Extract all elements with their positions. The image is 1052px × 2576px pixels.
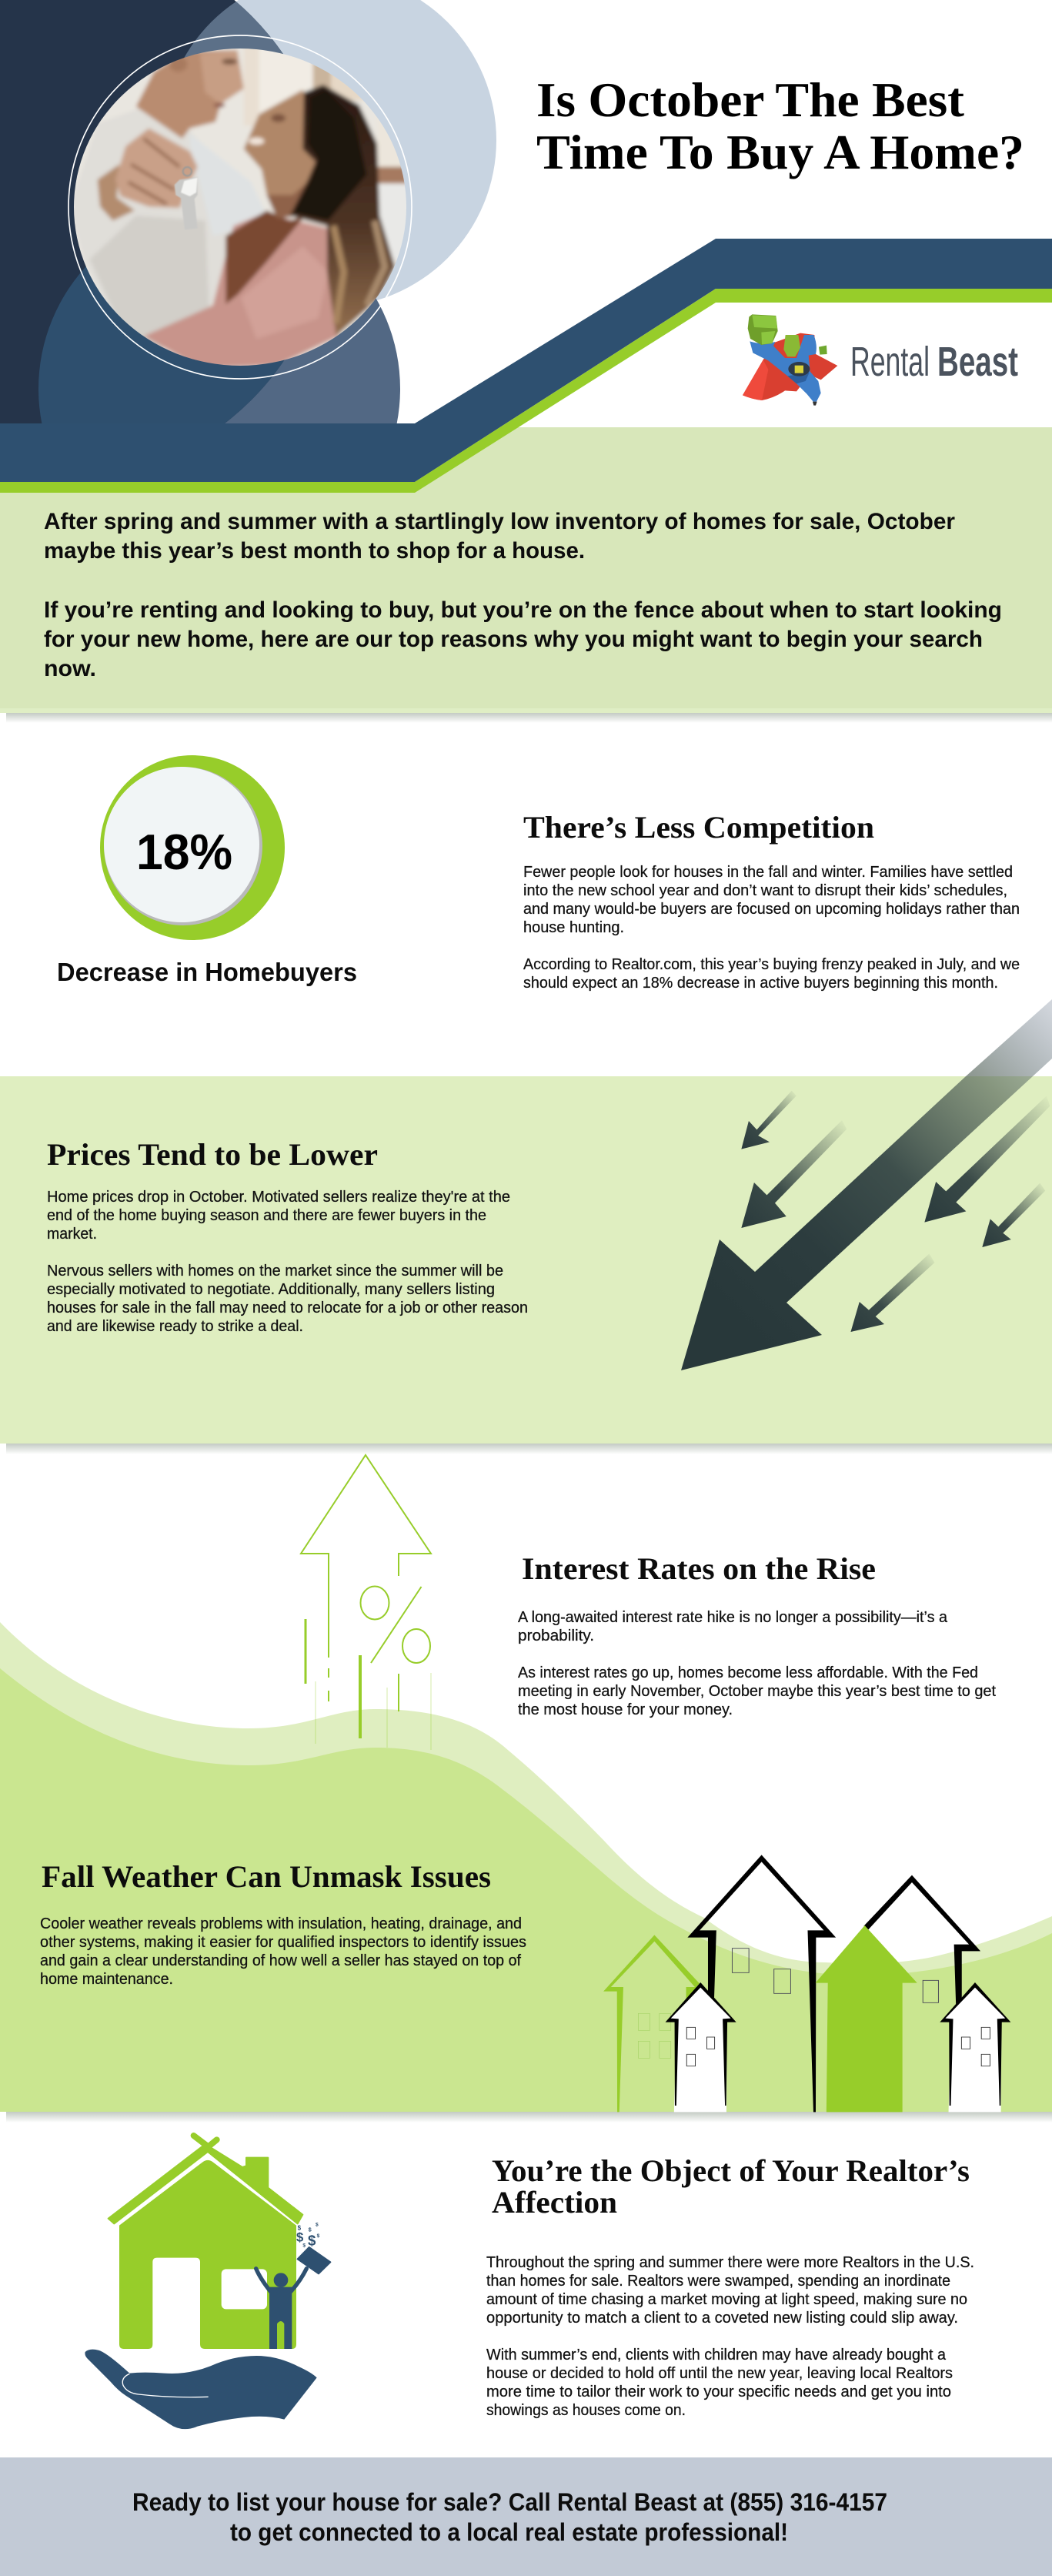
icon: house on hand with person: $ [296,2230,304,2245]
section: prices lower: and are likewise ready to strike a deal. [47,1318,303,1335]
icon: house on hand with person [85,2136,330,2429]
chart: falling arrows [681,999,1052,1370]
title [536,73,1024,179]
section: prices lower: houses for sale in the fall may need to relocate for a job or other reason [47,1300,528,1316]
stat: 18% decrease: 18% [136,824,232,880]
section: prices lower: Prices Tend to be Lower [47,1137,378,1172]
icon: house on hand with person: $ [316,2223,319,2228]
section: prices lower: Home prices drop in October. Motivated sellers realize they're at the [47,1189,510,1206]
intro text: for your new home, here are our top reasons why you might want to begin your search [44,627,983,652]
title: Time To Buy A Home? [536,125,1024,179]
section: less competition: into the new school year and don’t want to disrupt their kids’ schedules, [523,882,1007,899]
hero circles [0,0,496,423]
icon: house on hand with person: $ [309,2226,312,2233]
section: prices lower: market. [47,1226,97,1243]
panel: intro background [0,427,1052,723]
icon: arrow-shaped houses [603,1855,1010,2112]
section: interest rates: meeting in early November, October maybe this year’s best time to get [518,1683,996,1700]
logo: Rental Beast [743,314,1018,406]
section: realtor affection: Affection [492,2185,617,2220]
section: realtor affection: showings as houses come on. [486,2402,686,2419]
section: less competition: house hunting. [523,919,624,936]
icon: rising arrow with percent [301,1455,431,1750]
icon: superhero mascot [743,314,837,406]
section: prices lower: end of the home buying season and there are fewer buyers in the [47,1207,486,1224]
intro text: If you’re renting and looking to buy, but you’re on the fence about when to start looking [44,597,1002,623]
icon: house on hand with person: $ [302,2243,306,2248]
intro text: now. [44,656,96,681]
logo wordmark: Rental [850,339,930,385]
intro text [44,509,1002,681]
section: interest rates: probability. [518,1628,594,1644]
icon: house on hand with person: $ [308,2233,316,2249]
section: realtor affection [486,2153,974,2419]
section: fall weather: and gain a clear understanding of how well a seller has stayed on top of [40,1952,521,1969]
photo ring [68,35,412,379]
icon: house on hand with person: $ [298,2225,302,2232]
section: prices lower: especially motivated to negotiate. Additionally, many sellers listing [47,1281,495,1298]
section: less competition: According to Realtor.com, this year’s buying frenzy peaked in July, and we [523,956,1020,973]
section: less competition: should expect an 18% decrease in active buyers beginning this month. [523,975,998,992]
section: fall weather: Fall Weather Can Unmask Issues [42,1859,491,1894]
intro text: maybe this year’s best month to shop for a house. [44,538,585,564]
icon: house on hand with person: $ [317,2233,320,2239]
section: less competition: Fewer people look for houses in the fall and winter. Families have settled [523,864,1013,881]
section: realtor affection: Throughout the spring and summer there were more Realtors in the U.S. [486,2254,974,2271]
section: prices lower: Nervous sellers with homes on the market since the summer will be [47,1263,503,1280]
section: interest rates [518,1551,996,1718]
section: fall weather: other systems, making it easier for qualified inspectors to identify issues [40,1934,526,1951]
section: fall weather [40,1859,526,1988]
stat: 18% decrease: Decrease in Homebuyers [57,958,357,986]
section: realtor affection: than homes for sale. Realtors were swamped, spending an inordinate [486,2273,950,2290]
title: Is October The Best [536,73,964,127]
chevron band [0,239,1052,493]
section: realtor affection: With summer’s end, clients with children may have already bought a [486,2347,947,2364]
section: realtor affection: You’re the Object of Your Realtor’s [492,2153,970,2188]
section: fall weather: home maintenance. [40,1971,173,1988]
intro text: After spring and summer with a startlingly low inventory of homes for sale, October [44,509,955,534]
section: realtor affection: amount of time chasing a market moving at light speed, making sure no [486,2291,967,2308]
section: interest rates: Interest Rates on the Rise [522,1551,876,1586]
section: less competition [523,810,1020,992]
panel: footer call to action [0,2457,1052,2576]
panel: green wave background [0,1622,1052,2123]
section: prices lower [47,1137,528,1335]
panel: prices background [0,1076,1052,1454]
panel: footer call to action: to get connected to a local real estate professional! [230,2518,788,2546]
stat: 18% decrease [57,755,357,986]
section: less competition: There’s Less Competition [523,810,874,845]
section: less competition: and many would-be buyers are focused on upcoming holidays rather than [523,901,1020,918]
section: interest rates: As interest rates go up, homes become less affordable. With the Fed [518,1664,978,1681]
section: fall weather: Cooler weather reveals problems with insulation, heating, drainage, and [40,1915,522,1932]
photo: couple holding house key [68,35,413,379]
section: realtor affection: more time to tailor their work to your specific needs and get you into [486,2384,951,2400]
panel: footer call to action: Ready to list your house for sale? Call Rental Beast at (855) 316-4157 [132,2488,887,2516]
section: interest rates: A long-awaited interest rate hike is no longer a possibility—it’s a [518,1609,948,1626]
section: interest rates: the most house for your money. [518,1701,733,1718]
logo wordmark: Beast [937,339,1018,385]
section: realtor affection: opportunity to match a client to a coveted new listing could slip away. [486,2310,958,2327]
section: realtor affection: house or decided to hold off until the new year, leaving local Realtors [486,2365,953,2382]
icon: person with briefcase [256,2247,330,2349]
